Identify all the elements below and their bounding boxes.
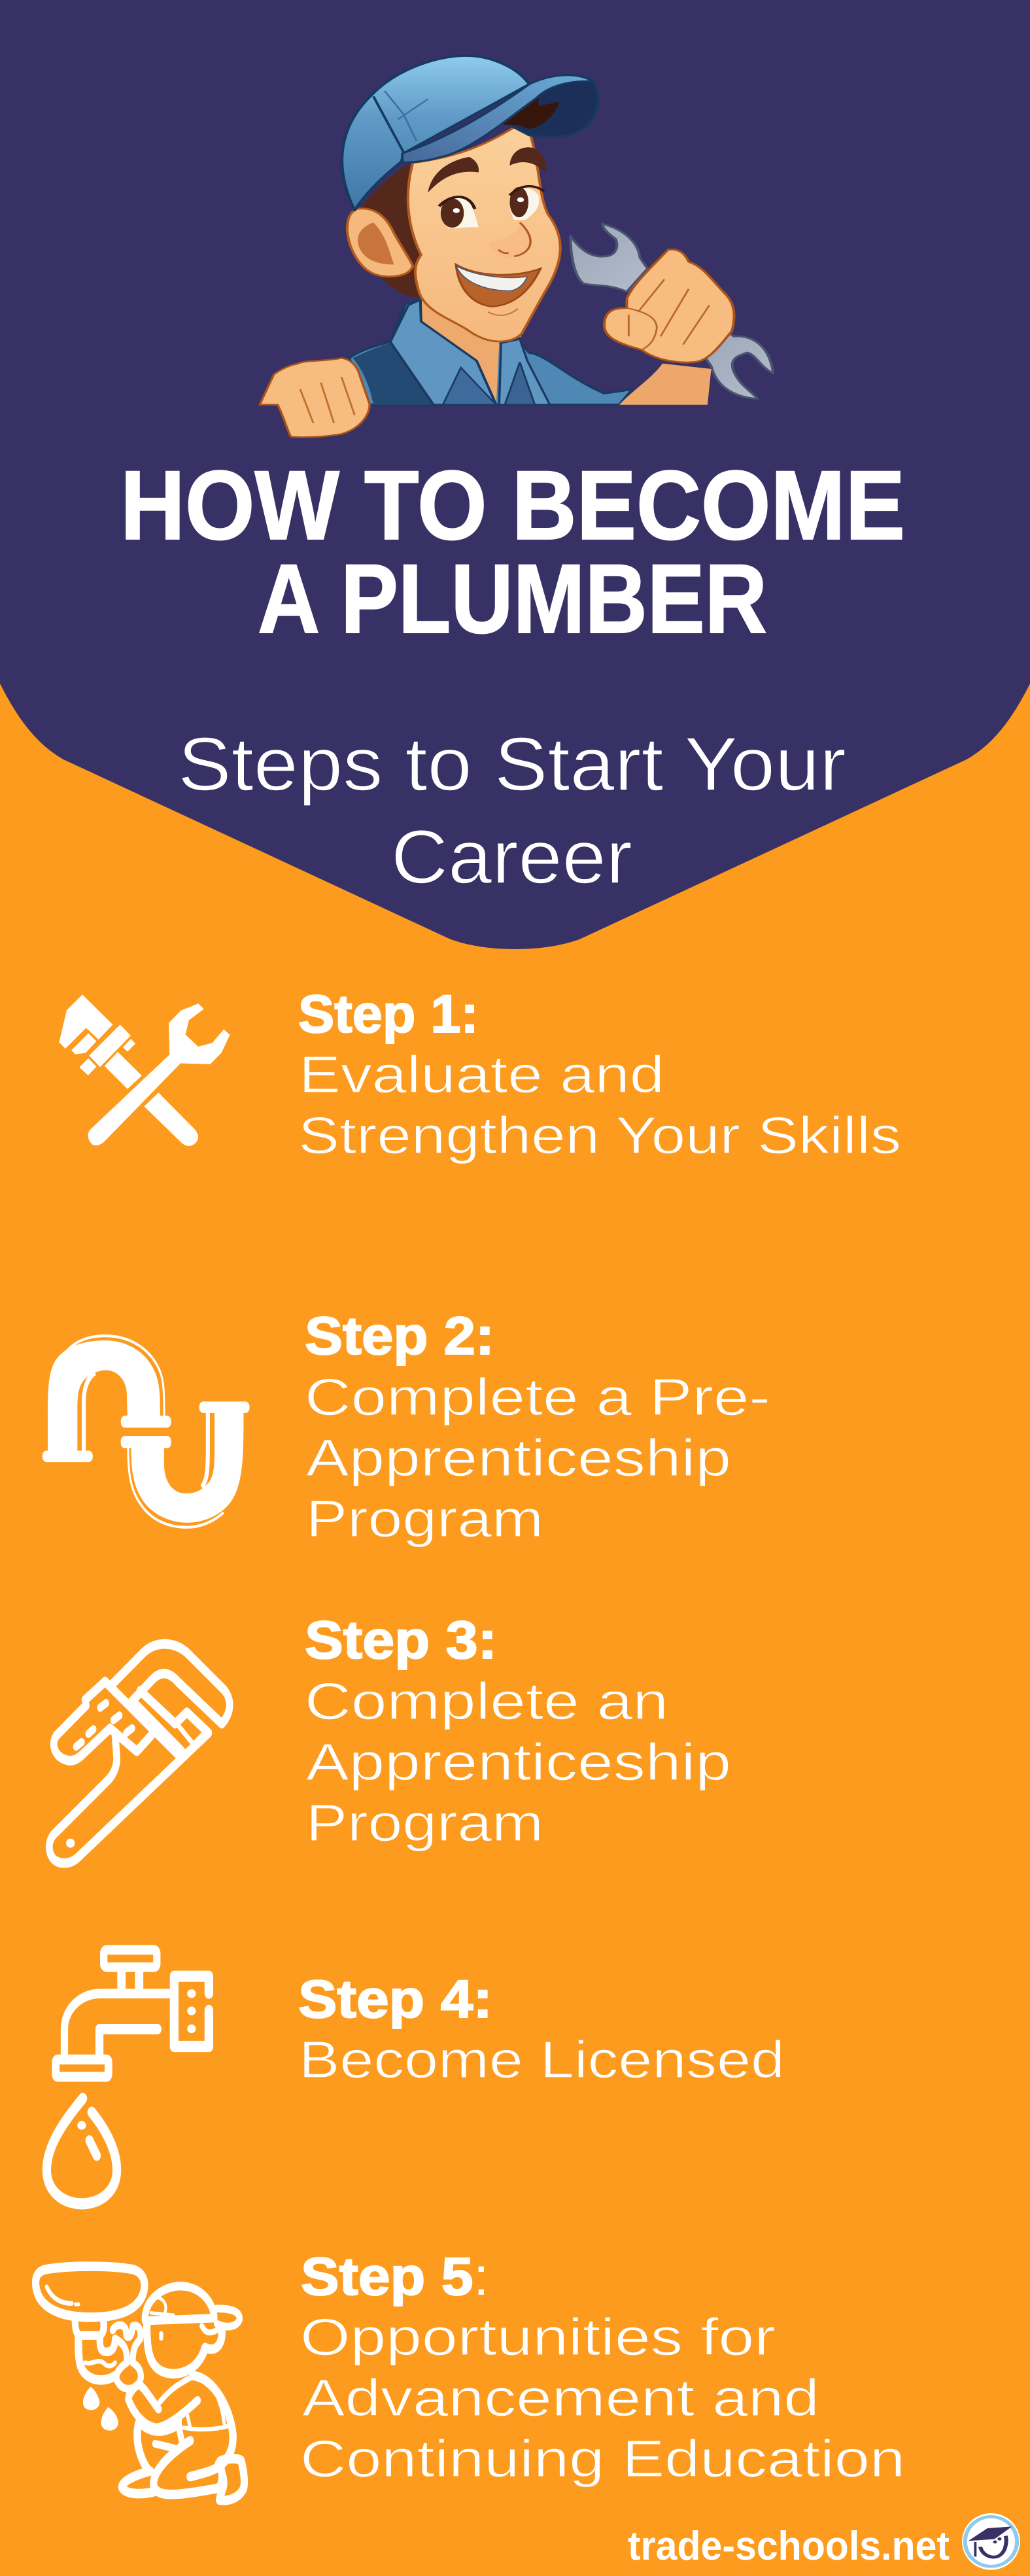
step 1 text: Step 1: — [298, 984, 479, 1044]
step 5 text: Step 5: — [301, 2247, 489, 2306]
cap dome — [342, 56, 529, 210]
step 1 text — [298, 984, 901, 1164]
icon: plumber fixing a sink — [35, 2267, 244, 2500]
neck — [421, 293, 522, 405]
step 5 text: Opportunities for — [300, 2308, 776, 2366]
step 3 text: Complete an — [305, 1672, 668, 1730]
title — [120, 450, 905, 653]
step 3 text — [305, 1610, 731, 1852]
icon: pipe wrench — [49, 1644, 230, 1863]
step 5 text: Advancement and — [302, 2369, 819, 2427]
subtitle: Steps to Start Your — [178, 722, 846, 807]
ear — [347, 209, 413, 277]
left fist — [260, 358, 369, 437]
logo: graduation cap badge — [962, 2513, 1020, 2570]
subtitle: Career — [391, 814, 632, 899]
icon: faucet and water drop — [46, 1950, 209, 2204]
right arm — [619, 364, 712, 405]
step 5 text: Continuing Education — [300, 2429, 905, 2488]
step 2 text: Program — [306, 1489, 543, 1548]
eyebrows — [428, 157, 479, 193]
head — [146, 2326, 222, 2374]
step 4 text: Become Licensed — [299, 2030, 785, 2089]
cap brim underside — [499, 75, 598, 137]
face — [408, 125, 560, 341]
step 3 text: Program — [306, 1794, 543, 1852]
shirt collar — [390, 300, 496, 405]
right fist — [604, 249, 734, 362]
title: A PLUMBER — [258, 544, 767, 653]
icon: crossed wrenches — [59, 994, 230, 1146]
mascot: plumber with wrench — [260, 56, 773, 437]
wrench — [570, 224, 773, 399]
cap brim — [402, 75, 593, 162]
subtitle — [178, 722, 846, 899]
step 2 text: Step 2: — [305, 1306, 494, 1366]
step 3 text: Step 3: — [305, 1610, 497, 1670]
hair — [360, 163, 424, 298]
header banner — [0, 0, 1030, 949]
step 5 text — [300, 2247, 905, 2488]
step 4 text: Step 4: — [298, 1970, 492, 2029]
step 2 text — [305, 1306, 770, 1548]
mouth — [456, 264, 540, 307]
eyes — [440, 198, 479, 228]
brand name: trade-schools.net — [628, 2524, 950, 2569]
nose — [490, 222, 530, 258]
step 4 text — [298, 1970, 785, 2089]
drips — [84, 2389, 98, 2409]
step 1 text: Strengthen Your Skills — [298, 1106, 901, 1164]
body — [190, 2376, 233, 2477]
cap creases — [385, 91, 428, 141]
hair under brim — [503, 94, 559, 129]
icon: drain pipes — [43, 1336, 250, 1527]
step 2 text: Apprenticeship — [306, 1429, 731, 1487]
shirt — [349, 300, 632, 405]
step 3 text: Apprenticeship — [306, 1733, 731, 1791]
chin crease — [488, 309, 518, 315]
cap — [145, 2286, 215, 2321]
bolt hole — [68, 1841, 73, 1845]
step 1 text: Evaluate and — [299, 1045, 664, 1104]
title: HOW TO BECOME — [120, 450, 905, 560]
step 2 text: Complete a Pre- — [305, 1368, 770, 1426]
